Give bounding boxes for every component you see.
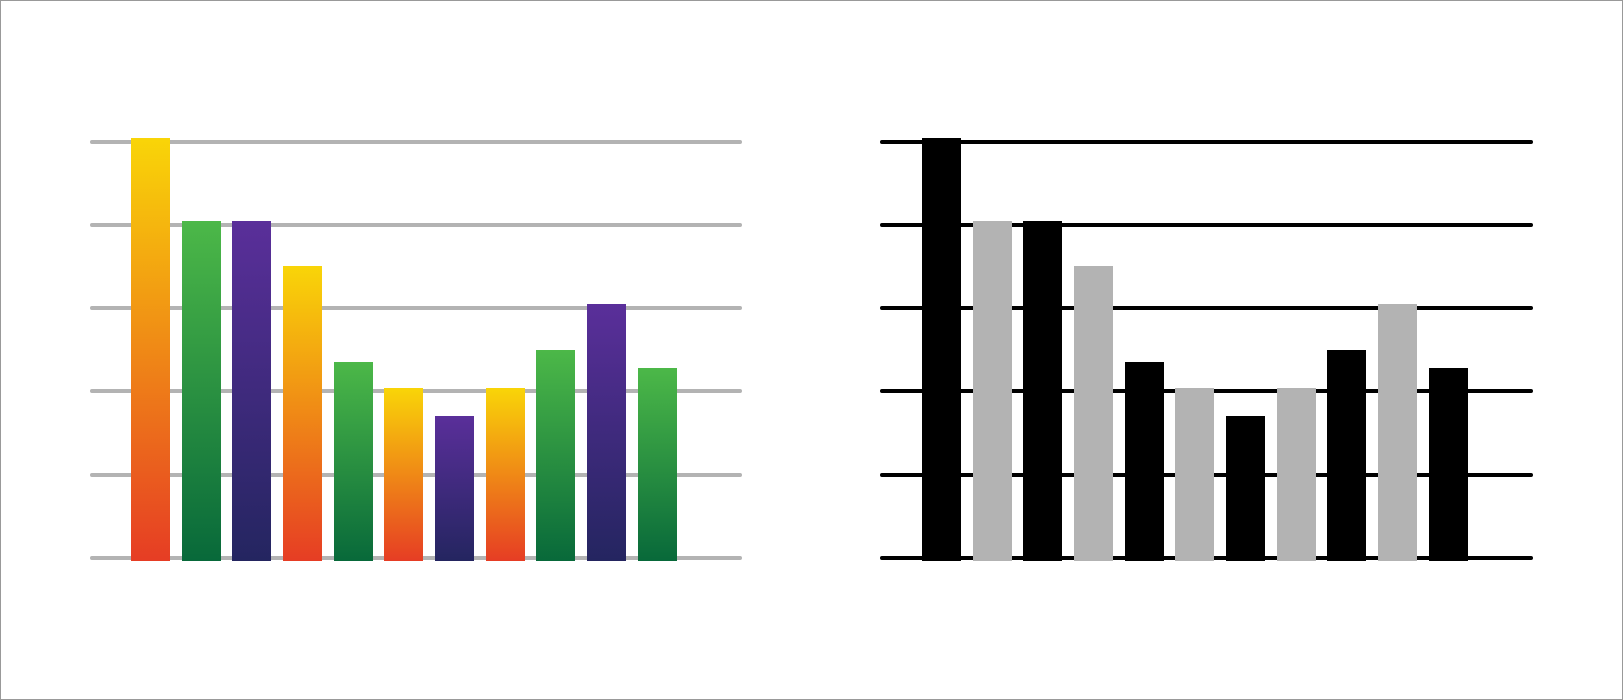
chart: black and gray bar chart	[882, 138, 1531, 561]
chart: colored bar chart	[92, 138, 740, 561]
